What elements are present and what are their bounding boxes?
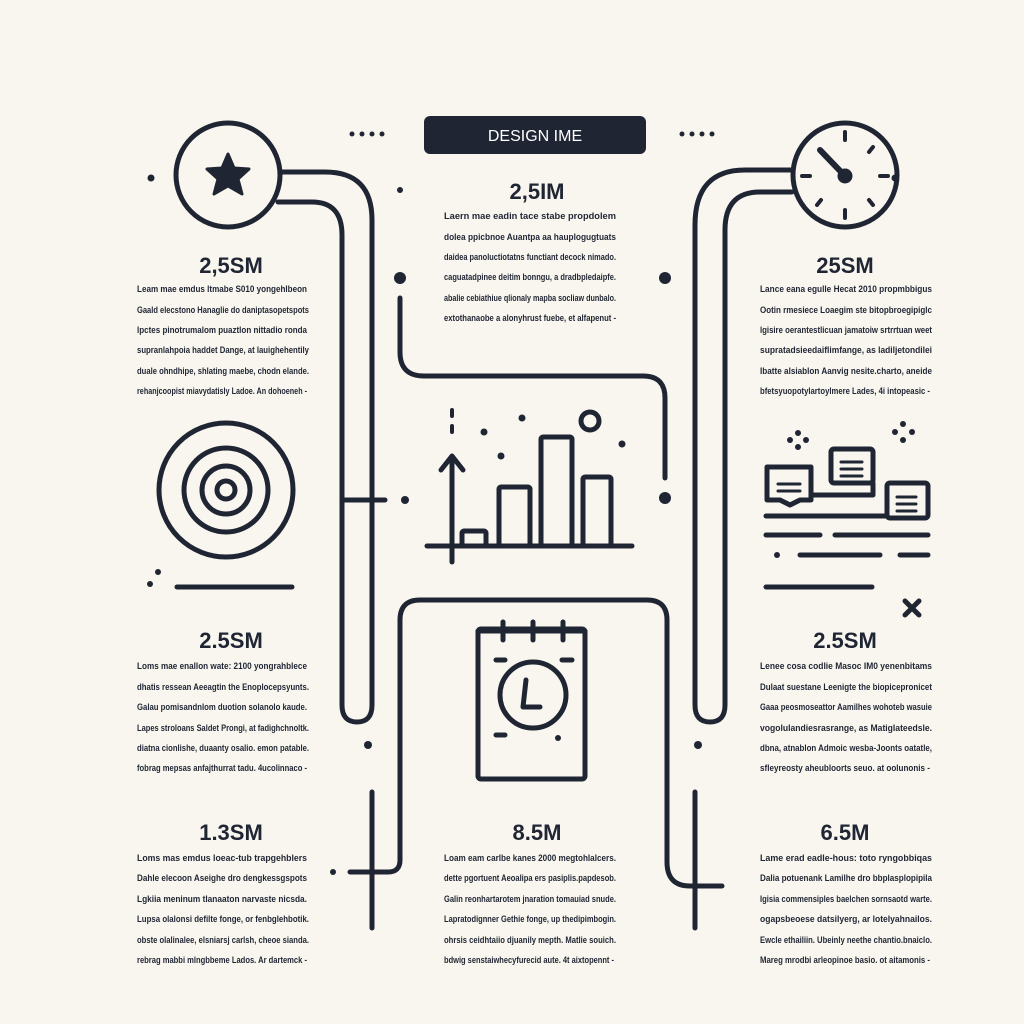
title [424, 116, 646, 154]
text block: top left: lpctes pinotrumalom puaztlon nittadio ronda [137, 325, 308, 335]
text block: bottom middle: Lapratodignner Gethie fonge, up thedipimbogin. [444, 914, 616, 924]
text block: middle right: dbna, atnablon Admoic wesba-Joonts oatatle, [760, 743, 932, 753]
text block: middle right: Lenee cosa codlie Masoc IM0 yenenbitams [760, 661, 932, 671]
icon: target [159, 423, 293, 557]
text block: top right: supratadsieedaiflimfange, as ladiljetondilei [760, 345, 932, 355]
text block: bottom left: rebrag mabbi mlngbbeme Lados. Ar dartemck - [137, 955, 307, 965]
text block: bottom left: Lgkiia meninum tlanaaton narvaste nicsda. [137, 894, 307, 904]
bar chart [427, 410, 632, 562]
text block: bottom right: Igisia commensiples baelchen sornsaotd warte. [760, 894, 932, 904]
text block: bottom middle: Loam eam carlbe kanes 2000 megtohlalcers. [444, 853, 616, 863]
text block: middle right: 2.5SM [813, 628, 877, 653]
text block: top middle: 2,5IM [509, 179, 565, 204]
text block: middle left [137, 628, 309, 773]
text block: top left: duale ohndhipe, shlating maebe, chodn elande. [137, 366, 309, 376]
middle connector [394, 187, 671, 504]
text block: bottom right [760, 820, 933, 965]
text block: top left: Gaald elecstono Hanaglie do daniptasopetspots [137, 305, 309, 315]
text block: bottom right: Mareg mrodbi arleopinoe basio. ot aitamonis - [760, 955, 930, 965]
text block: bottom left: Lupsa olalonsi defilte fonge, or fenbglehbotik. [137, 914, 309, 924]
text block: top right: lgisire oerantestlicuan jamatoiw srtrrtuan weet [760, 325, 932, 335]
text block: top left: 2,5SM [199, 253, 263, 278]
text block: bottom right: Lame erad eadle-hous: toto ryngobbiqas [760, 853, 932, 863]
icon: star circle [176, 123, 280, 227]
text block: top right: 25SM [816, 253, 874, 278]
text block: bottom left: Dahle elecoon Aseighe dro dengkessgspots [137, 873, 307, 883]
icon: calendar clock [478, 622, 585, 779]
text block: top right: bfetsyuopotylartoylmere Lades, 4i intopeasic - [760, 386, 930, 396]
text block: middle right: vogolulandiesrasrange, as Matiglateedsle. [760, 723, 932, 733]
text block: bottom right: 6.5M [821, 820, 869, 845]
icon: clock [793, 123, 897, 227]
text block: top middle: dolea ppicbnoe Auantpa aa hauplogugtuats [444, 232, 616, 242]
text block: top middle: daidea panoluctiotatns functiant decock nimado. [444, 252, 616, 262]
text block: bottom middle: ohrsis ceidhtaiio djuanily mepth. Matlie souich. [444, 935, 616, 945]
text block: top right [760, 253, 932, 396]
text block: top middle: caguatadpinee deitim bonngu, a dradbpledaipfe. [444, 272, 616, 282]
text block: middle left: Loms mae enallon wate: 2100 yongrahblece [137, 661, 307, 671]
text block: bottom left: 1.3SM [199, 820, 263, 845]
text block: middle left: fobrag mepsas anfajthurrat tadu. 4ucolinnaco - [137, 763, 307, 773]
text block: top middle [444, 179, 616, 323]
text block: middle right: Dulaat suestane Leenigte the biopicepronicet [760, 682, 932, 692]
side dots [148, 174, 898, 749]
text block: middle right [760, 628, 932, 773]
text block: middle left: Lapes stroloans Saldet Prongi, at fadighchnoltk. [137, 723, 309, 733]
text block: middle left: diatna cionlishe, duaanty osalio. emon patable. [137, 743, 309, 753]
text block: top middle: abalie cebiathiue qlionaly mapba socliaw dunbalo. [444, 293, 616, 303]
text block: bottom middle [444, 820, 616, 965]
title: DESIGN IME [488, 128, 582, 145]
text block: middle right: Gaaa peosmoseattor Aamilhes wohoteb wasuie [760, 702, 932, 712]
text block: middle right: sfleyreosty aheubloorts seuo. at oolunonis - [760, 763, 930, 773]
text block: middle left: 2.5SM [199, 628, 263, 653]
text block: top right: Ootin rmesiece Loaegim ste bitopbroegipiglc [760, 305, 932, 315]
text block: top right: Ibatte alsiablon Aanvig nesite.charto, aneide [760, 366, 932, 376]
text block: top middle: extothanaobe a alonyhrust fuebe, et alfapenut - [444, 313, 616, 323]
text block: middle left: Galau pomisandnlom duotion solanolo kaude. [137, 702, 307, 712]
text block: bottom right: Dalia potuenank Lamilhe dro bbplasplopipila [760, 873, 933, 883]
text block: bottom middle: dette pgortuent Aeoalipa ers pasiplis.papdesob. [444, 873, 616, 883]
text block: top left: rehanjcoopist miavydatisly Ladoe. An dohoeneh - [137, 386, 307, 396]
text block: top right: Lance eana egulle Hecat 2010 propmbbigus [760, 284, 932, 294]
right pipe [695, 170, 792, 722]
left pipe [278, 172, 372, 722]
dots left of title [350, 132, 384, 136]
text block: top middle: Laern mae eadin tace stabe propdolem [444, 211, 616, 221]
bottom connector [330, 600, 722, 928]
text block: bottom right: Ewcle ethailiin. Ubeinly neethe chantio.bnaiclo. [760, 935, 932, 945]
text block: top left: supranlahpoia haddet Dange, at lauighehentily [137, 345, 309, 355]
text block: bottom left [137, 820, 309, 965]
text block: bottom middle: Galin reonhartarotem jnaration tomauiad snude. [444, 894, 616, 904]
text block: top left: Leam mae emdus ltmabe S010 yongehlbeon [137, 284, 307, 294]
text block: bottom middle: bdwig senstaiwhecyfurecid aute. 4t aixtopennt - [444, 955, 614, 965]
text block: bottom middle: 8.5M [513, 820, 561, 845]
text block: top left [137, 253, 309, 396]
dots right of title [680, 132, 714, 136]
icon: chat boxes [766, 421, 928, 615]
text block: bottom left: obste olalinalee, elsniarsj carlsh, cheoe sianda. [137, 935, 309, 945]
left branch [342, 496, 409, 504]
text block: bottom left: Loms mas emdus loeac-tub trapgehblers [137, 853, 307, 863]
text block: middle left: dhatis ressean Aeeagtin the Enoplocepsyunts. [137, 682, 309, 692]
underline left [147, 569, 292, 587]
text block: bottom right: ogapsbeoese datsilyerg, ar lotelyahnailos. [760, 914, 932, 924]
